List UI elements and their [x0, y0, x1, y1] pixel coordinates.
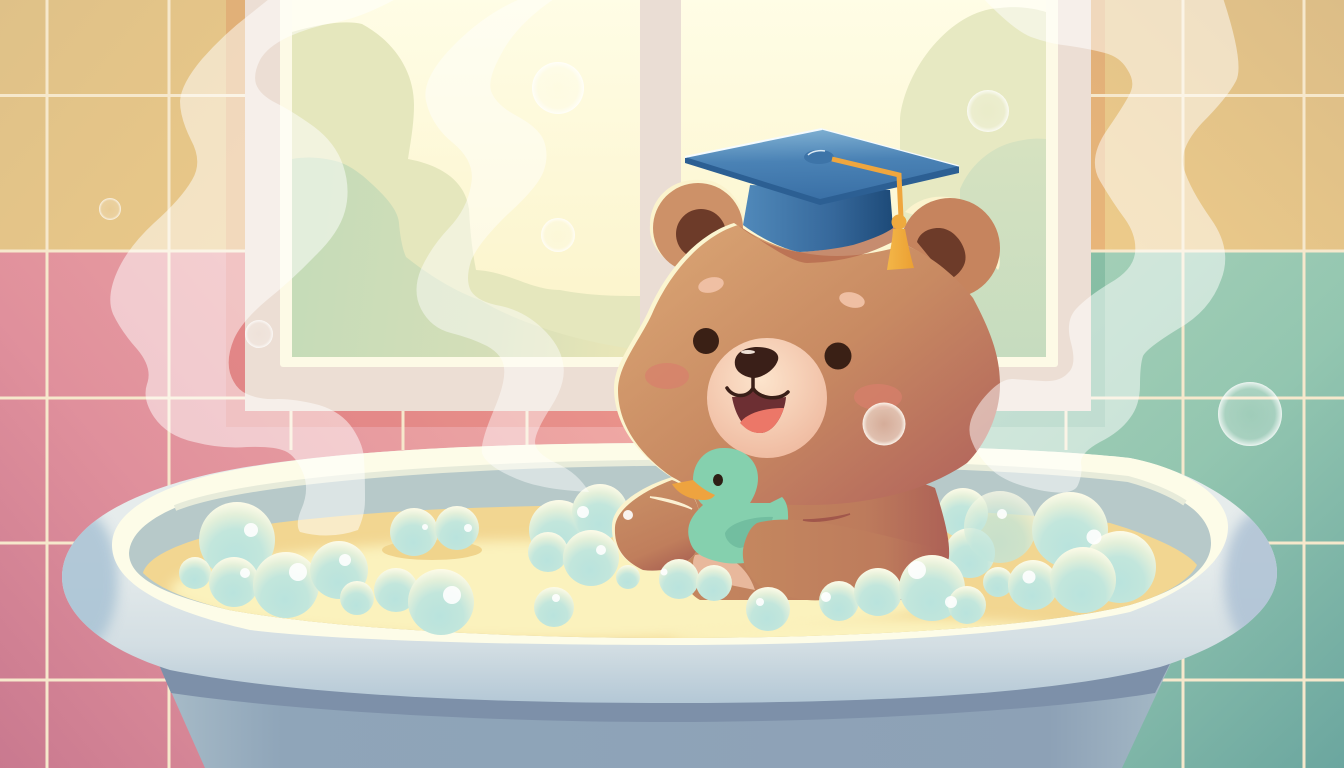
body crease — [803, 514, 850, 521]
cap board — [685, 129, 959, 205]
muzzle — [707, 338, 827, 458]
steam: center wisp — [416, 0, 589, 492]
head fur edge — [614, 223, 996, 503]
tub body — [157, 650, 1177, 768]
duck eye — [713, 474, 723, 486]
inner frame trim — [280, 0, 1058, 367]
window frame — [245, 0, 1091, 411]
foam bubbles: left group — [179, 502, 479, 635]
rim shadow band — [157, 650, 1177, 722]
duck bill — [672, 480, 715, 500]
bear left paw — [612, 477, 700, 571]
left pane with garden hills — [292, 0, 640, 357]
tub interior — [129, 465, 1211, 638]
head — [618, 225, 1000, 505]
graduation cap — [685, 129, 959, 270]
bear right arm — [743, 520, 945, 600]
teddy bear — [612, 129, 1000, 600]
foam bubbles: right group — [819, 491, 1156, 624]
duck wing — [725, 517, 773, 548]
right ear — [900, 197, 1000, 298]
floating bubbles — [99, 62, 1282, 446]
tassel cord — [832, 159, 901, 218]
steam: right wisp — [969, 0, 1239, 493]
steam: left wisp — [110, 0, 403, 536]
bath water — [143, 505, 1197, 650]
cheeks — [645, 363, 902, 410]
nose — [735, 347, 778, 378]
mouth — [727, 378, 788, 433]
belly shadow near water — [693, 554, 755, 590]
duck body — [688, 448, 788, 564]
tassel — [887, 229, 914, 270]
eyes — [693, 328, 852, 370]
rim side shading — [42, 510, 1300, 650]
left ear — [650, 180, 745, 273]
right pane with garden hills — [681, 0, 1046, 357]
rubber duck — [672, 448, 788, 564]
cap shadow on head — [738, 225, 905, 263]
window mullion — [640, 0, 681, 367]
rim inner band — [112, 443, 1228, 645]
bear body — [667, 475, 949, 600]
window — [245, 0, 1091, 411]
brow highlights — [697, 275, 866, 310]
tassel knob — [892, 214, 906, 230]
tub rim — [62, 443, 1277, 703]
cap button — [804, 150, 834, 164]
foam bubbles: center group — [534, 506, 790, 631]
cap base — [743, 185, 893, 252]
bubbles behind bear — [528, 484, 995, 578]
bathtub — [42, 443, 1300, 768]
